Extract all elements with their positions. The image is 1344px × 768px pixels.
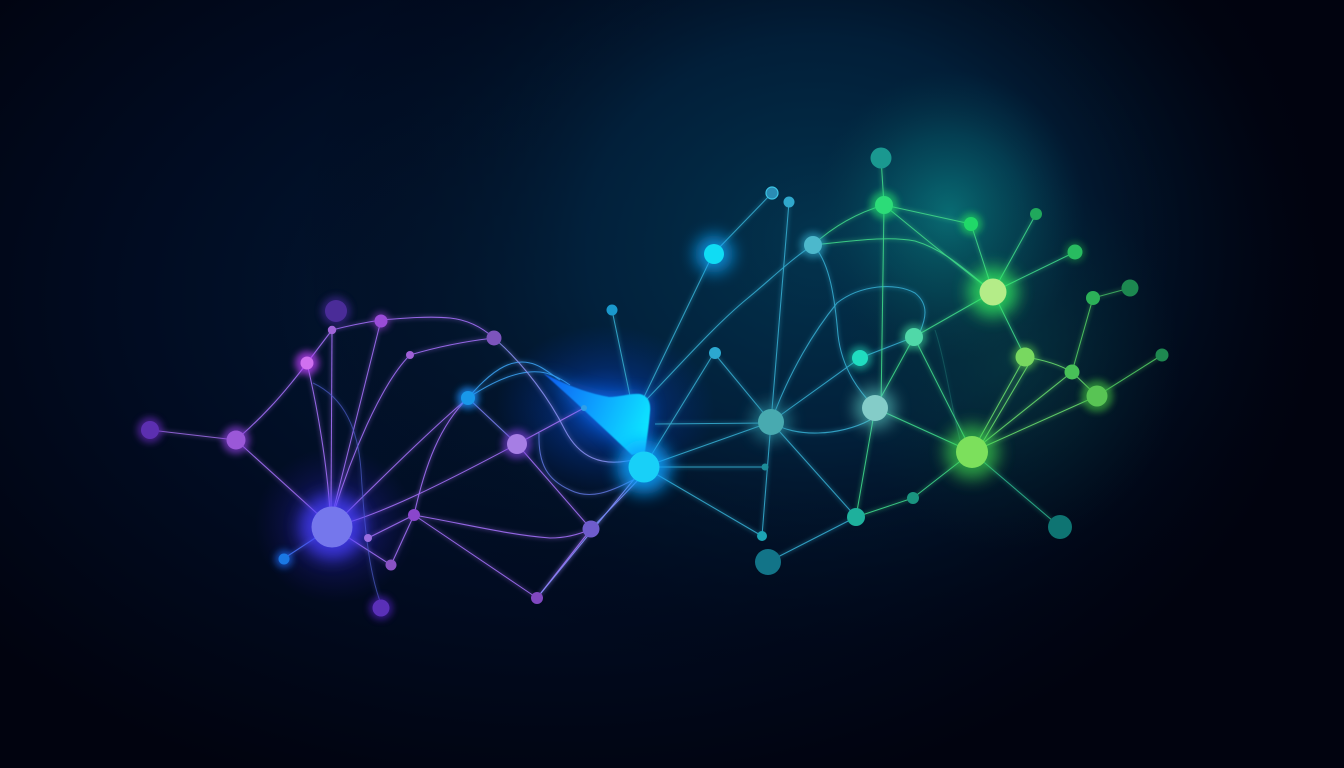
connections: green cluster	[813, 158, 1162, 527]
nodes: blue and teal middle	[606, 187, 919, 575]
connections: purple cluster	[150, 317, 644, 598]
connections: blue curves through the wedge	[283, 338, 640, 604]
nodes: purple cluster	[137, 296, 600, 620]
connections: blue and teal middle	[612, 193, 925, 562]
nodes: green cluster	[870, 148, 1168, 539]
blue wedge shape	[543, 373, 650, 455]
